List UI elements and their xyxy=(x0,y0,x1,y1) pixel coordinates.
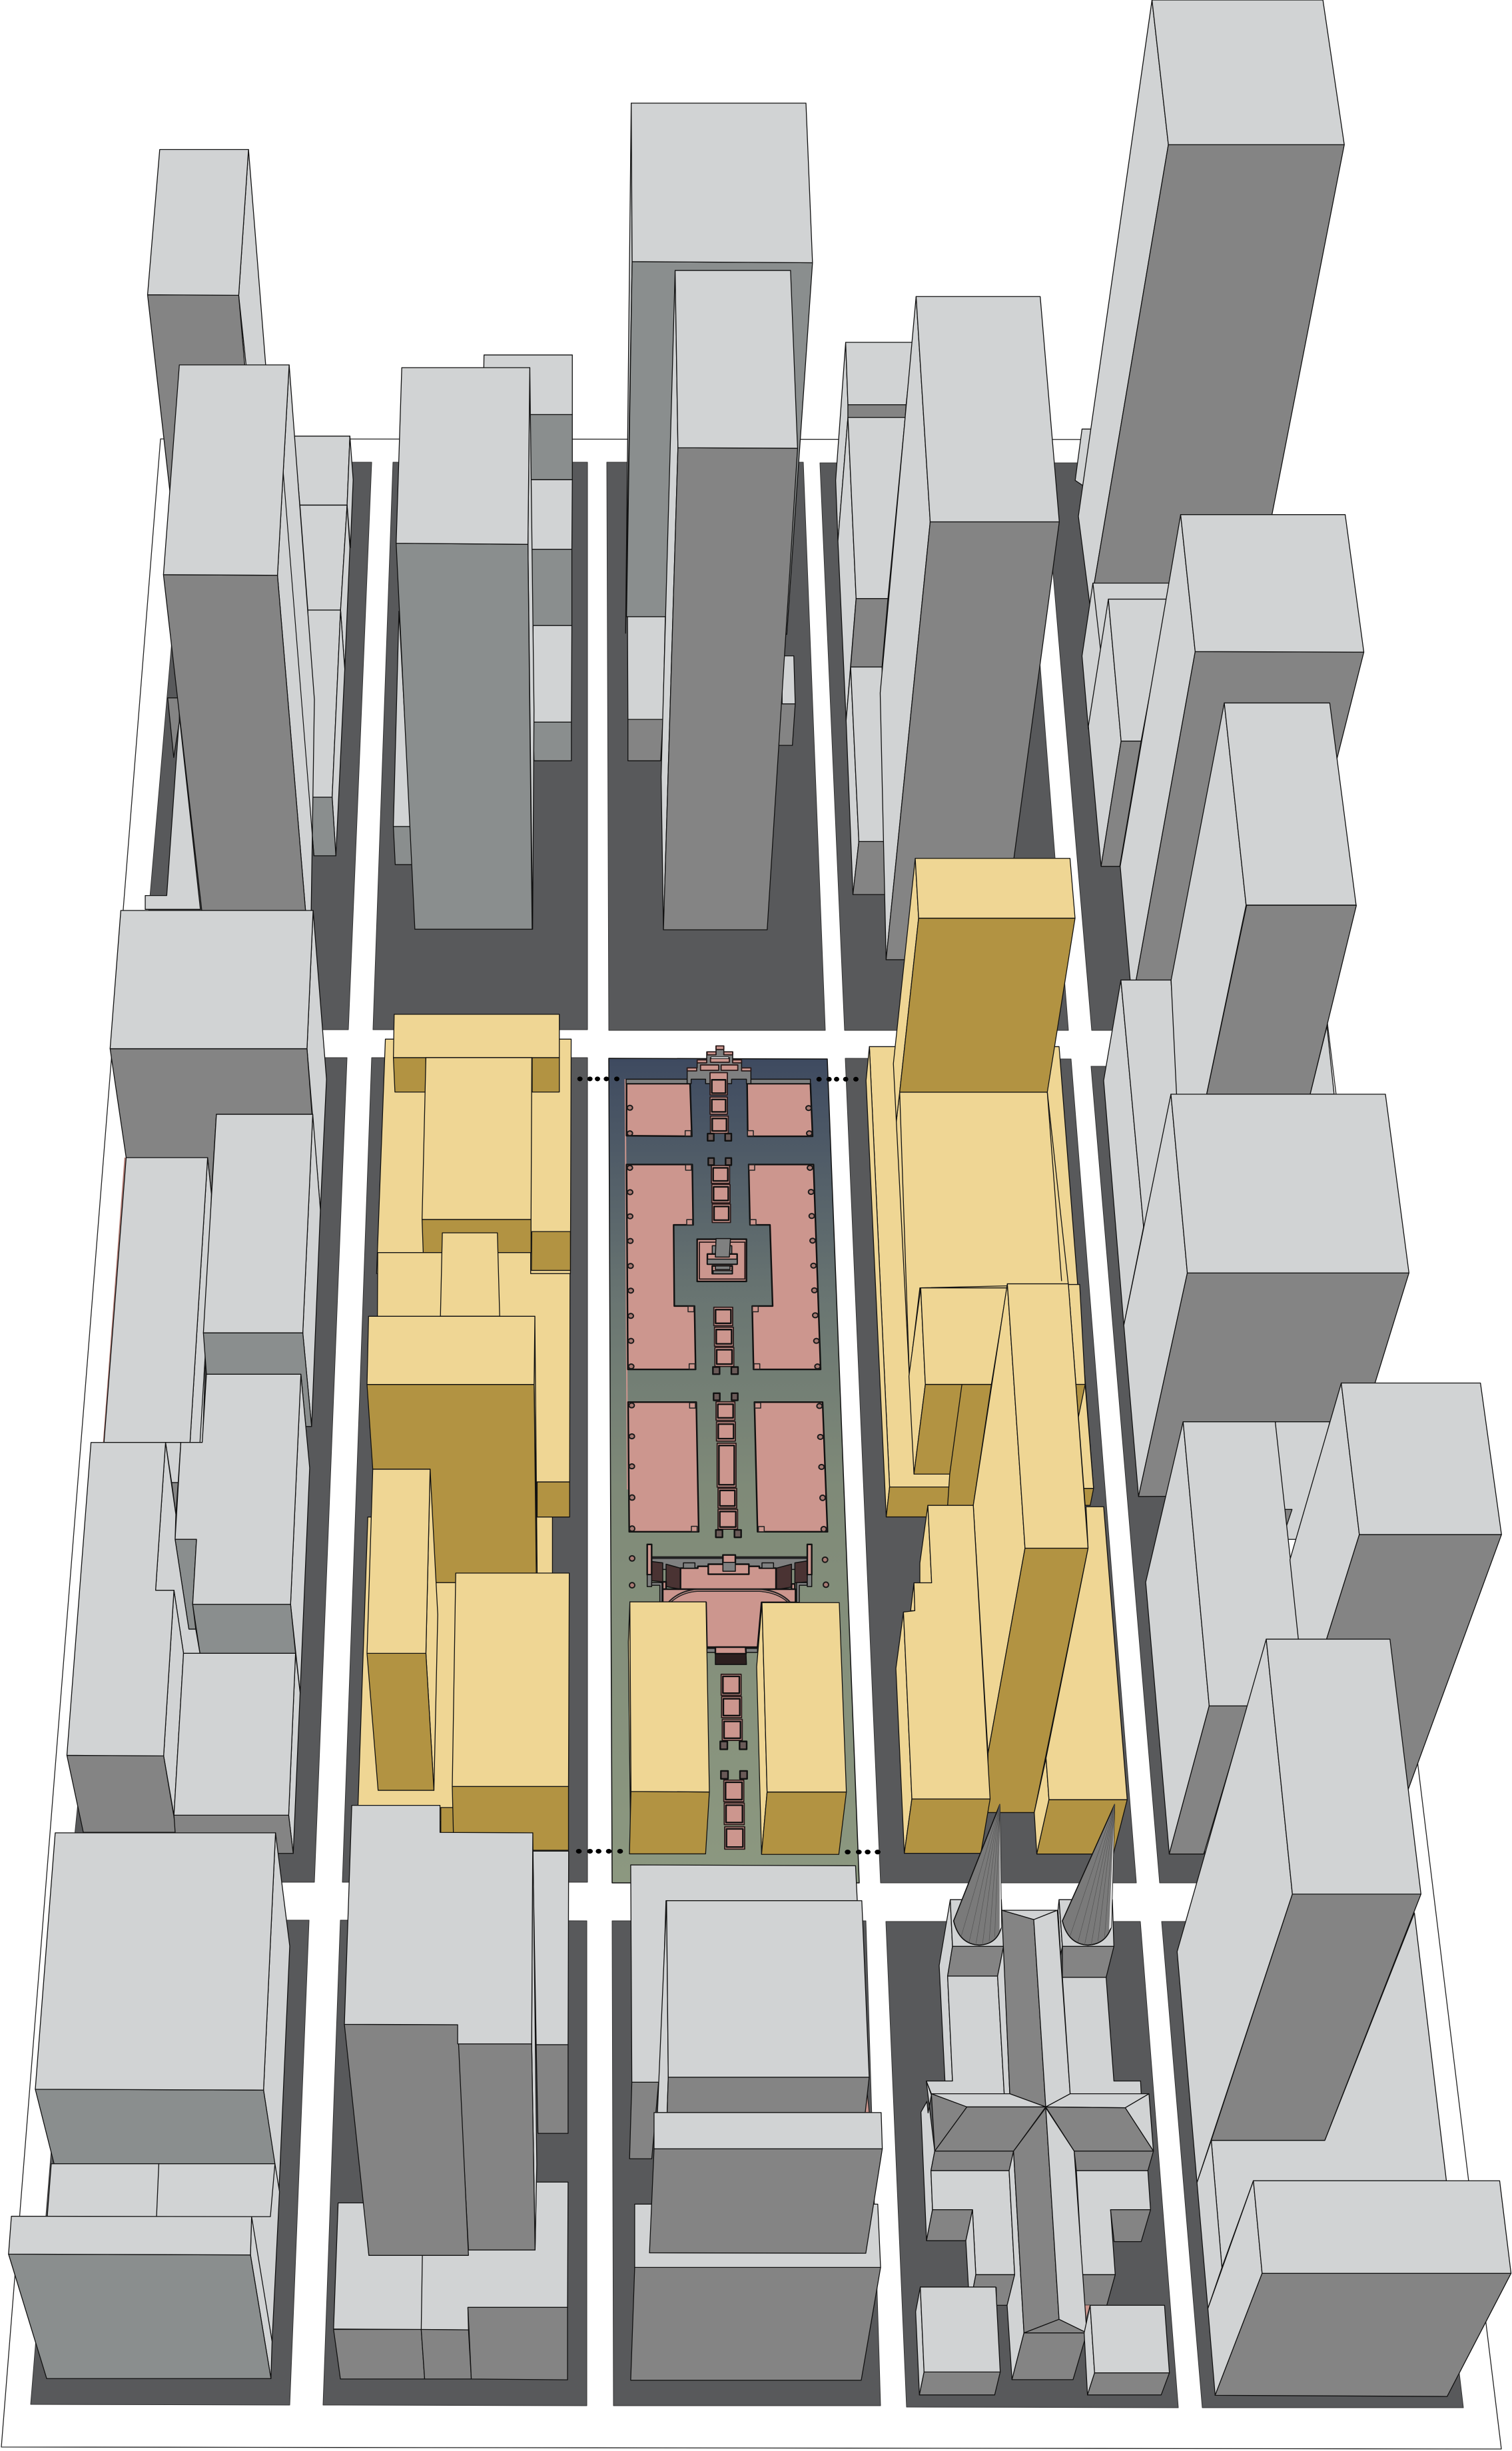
yellow site buildings, centre xyxy=(628,1602,847,1854)
tower: east column small rear xyxy=(1310,1026,1334,1094)
small block right xyxy=(1084,2305,1170,2395)
plaza upper details xyxy=(577,1046,859,1532)
north gateway xyxy=(687,1046,751,1084)
axial paving squares upper xyxy=(710,1073,736,1487)
top row towers, west and centre blocks xyxy=(145,103,813,930)
tower: north east mid xyxy=(1120,515,1364,980)
south third block podium xyxy=(631,2204,881,2380)
yellow rear slab xyxy=(376,1039,571,1273)
tower: east mid west xyxy=(1146,1422,1300,1854)
cathedral nave roof xyxy=(1002,1910,1070,2107)
yellow centre left xyxy=(628,1602,709,1854)
cathedral choir roof xyxy=(1007,2108,1087,2380)
cathedral west tower right xyxy=(1058,1900,1141,2094)
yellow east main volume xyxy=(897,1092,1068,1376)
yellow south west block xyxy=(441,1573,569,1850)
cathedral right transept xyxy=(1046,2094,1154,2171)
grey south east towers xyxy=(1177,1639,1511,2396)
low wide podium xyxy=(1212,1913,1446,2268)
tower: block four back stack xyxy=(836,342,913,894)
tower: west lower right xyxy=(174,1653,300,1854)
tower: south east corner xyxy=(1208,2181,1511,2396)
cone spire right xyxy=(1062,1804,1114,1945)
tower: east column slim xyxy=(1104,980,1185,1325)
small gate blocks lower xyxy=(716,1530,747,1779)
yellow east tower xyxy=(893,859,1075,1122)
cathedral lower right arm xyxy=(1076,2171,1150,2319)
cathedral west tower left xyxy=(927,1900,1010,2094)
tower: block three front xyxy=(661,270,797,930)
top row towers, east blocks xyxy=(836,0,1364,980)
tower: east large xyxy=(1124,1094,1409,1497)
south second block rear strip xyxy=(533,1851,569,2133)
tower: south west corner xyxy=(9,2217,272,2378)
tower: east mid east xyxy=(1290,1383,1501,1791)
cathedral xyxy=(916,1804,1170,2395)
tower: east rear small piece xyxy=(1276,1422,1330,1539)
yellow east low stepped block xyxy=(896,1505,990,1854)
south third block front tower xyxy=(649,2113,883,2253)
tower: west lower stepped xyxy=(67,1443,200,1832)
yellow mid block xyxy=(376,1233,570,1517)
tower: far west rear xyxy=(145,150,268,909)
tower: far west front xyxy=(163,365,314,915)
yellow east low right block xyxy=(1034,1507,1127,1854)
small gate blocks upper xyxy=(707,1134,738,1401)
south third block rear xyxy=(629,1865,857,2159)
tower: far west back stack xyxy=(294,436,353,856)
pink ground panels upper xyxy=(625,1079,827,1532)
tower: east column front of tall rear xyxy=(1207,905,1356,1094)
yellow site buildings, east xyxy=(866,859,1356,1854)
tower: west medium one xyxy=(203,1114,320,1427)
tower: south west large xyxy=(35,1833,290,2192)
tower: south second main xyxy=(344,1806,537,2255)
central plaza ground with gradient xyxy=(609,1058,859,1883)
cone spire left xyxy=(954,1804,1001,1945)
yellow lower base xyxy=(358,1517,552,1822)
dotted line markers south xyxy=(576,1849,881,1854)
yellow east tall slab xyxy=(973,1284,1088,1812)
tower: block two back stack xyxy=(394,355,572,865)
yellow upper block xyxy=(422,1058,532,1253)
lantern markers upper xyxy=(627,1106,824,1469)
tower: tallest north east xyxy=(1075,0,1344,607)
lantern markers lower xyxy=(629,1495,829,1588)
yellow east lower wing xyxy=(909,1285,1094,1505)
yellow large block xyxy=(367,1316,537,1582)
west long block xyxy=(104,1158,211,1515)
tower: block four main xyxy=(880,296,1059,960)
tower: west large xyxy=(110,910,326,1210)
central monument court xyxy=(697,1239,747,1281)
south second block podium xyxy=(334,2182,568,2380)
tower: block two main xyxy=(396,368,534,929)
grey east column towers xyxy=(1124,1094,1501,1854)
tower: block three rear xyxy=(625,103,813,761)
south palace forecourt xyxy=(647,1545,812,1664)
cathedral left transept xyxy=(921,2081,1046,2241)
cathedral lower left arm xyxy=(927,2171,1014,2305)
yellow east base xyxy=(866,1046,1094,1517)
yellow bar building xyxy=(394,1014,560,1092)
plaza lower details xyxy=(576,1489,881,1854)
south third block tower xyxy=(657,1901,869,2113)
city block ground plates xyxy=(31,462,1463,2408)
south row towers xyxy=(9,1806,883,2380)
grey west column towers xyxy=(67,910,326,1854)
south west low block xyxy=(47,2164,280,2342)
axial paving squares lower xyxy=(718,1489,745,1849)
tower: west medium two xyxy=(175,1374,310,1693)
small block left xyxy=(916,2287,1000,2395)
tower: south east large xyxy=(1177,1639,1421,2308)
yellow centre right xyxy=(757,1602,847,1854)
yellow site buildings, west xyxy=(358,1014,571,1850)
dotted line markers north xyxy=(577,1076,859,1082)
tower: low north east pair xyxy=(1082,583,1170,867)
yellow slim block xyxy=(367,1469,438,1790)
tower: east column rear top and side xyxy=(1171,703,1356,1094)
